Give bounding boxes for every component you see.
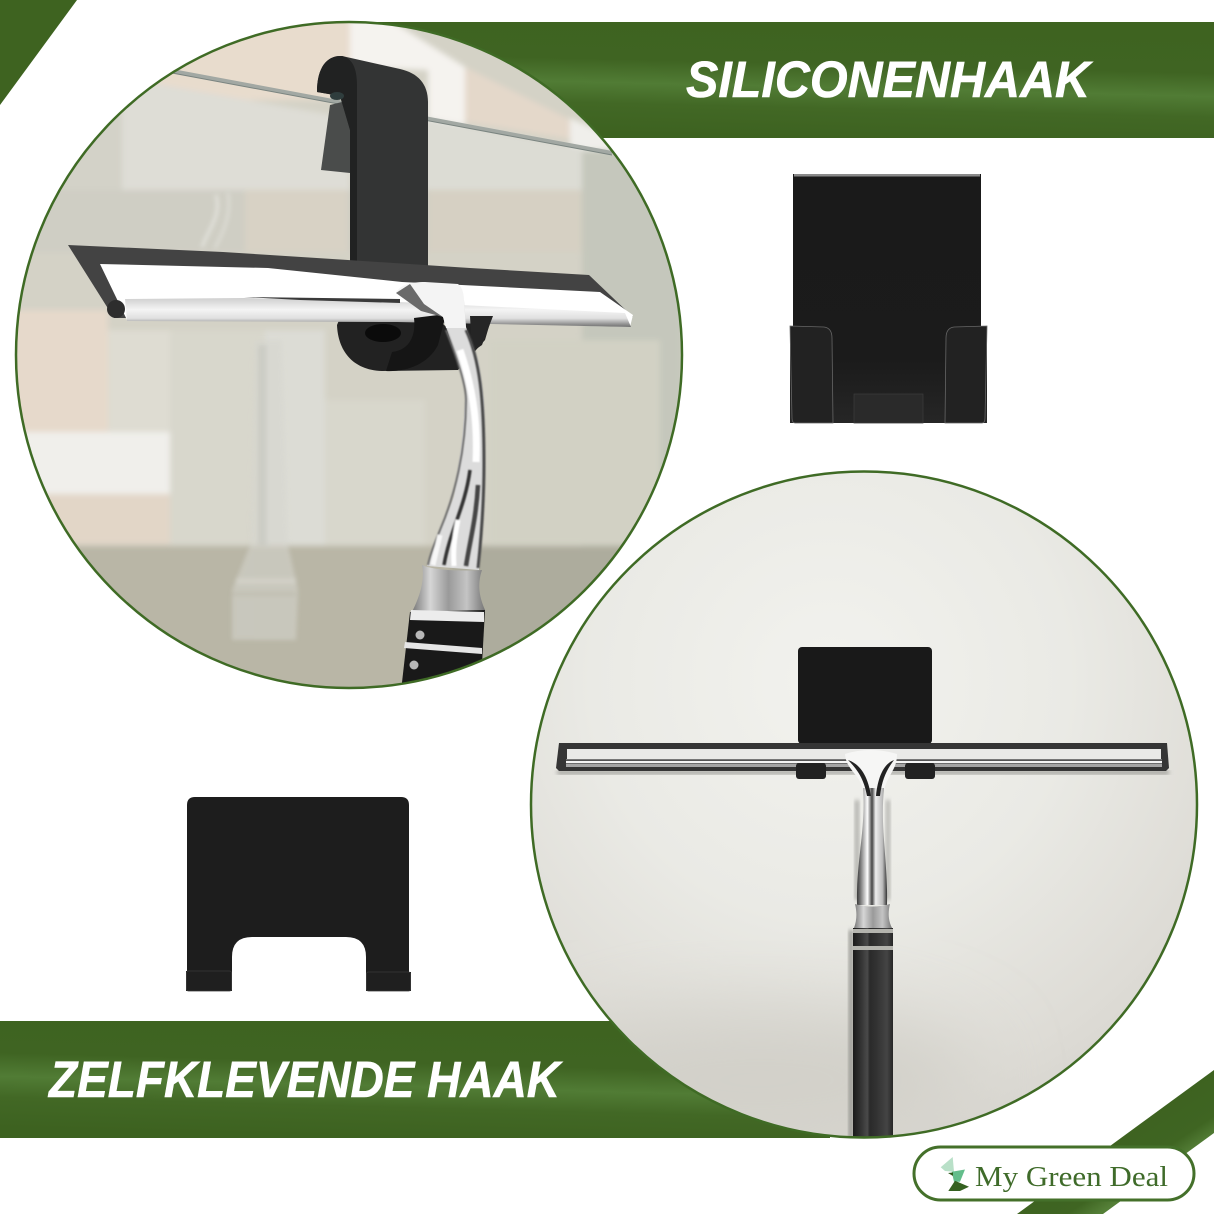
silver collar	[412, 565, 485, 612]
left clip	[796, 763, 826, 779]
product: black adhesive hook	[186, 797, 411, 991]
front clip of hook	[386, 314, 446, 371]
product: black silicone hook	[790, 174, 987, 423]
decorative diagonal stripe	[1017, 1070, 1214, 1214]
bottle reflection	[202, 193, 298, 640]
wall behind glass	[158, 24, 350, 101]
left beige wall	[17, 310, 108, 432]
black handle with rings	[402, 610, 485, 683]
rubber blade	[68, 245, 633, 318]
slot	[854, 394, 923, 423]
floor	[77, 544, 452, 687]
heading: zelfklevende haak: ZELFKLEVENDE HAAK	[47, 1051, 563, 1108]
chrome handle	[396, 282, 485, 570]
squeegee bar	[556, 743, 1169, 774]
photo circle: squeegee hanging on glass door	[0, 0, 700, 706]
chrome neck and handle	[845, 750, 897, 905]
rear cup of hook	[337, 322, 490, 371]
photo circle: squeegee on wall hook	[520, 460, 1210, 1150]
logo badge	[914, 1147, 1194, 1200]
chrome bar	[100, 264, 633, 327]
glass edge	[172, 71, 612, 153]
wall plate	[798, 647, 932, 744]
right pocket	[945, 326, 987, 423]
black handle with rings	[849, 928, 893, 1140]
foot right	[366, 972, 410, 991]
logo wordmark: My Green Deal	[975, 1161, 1168, 1193]
heading: siliconenhaak: SILICONENHAAK	[686, 51, 1093, 108]
decorative corner triangle	[0, 0, 77, 105]
banner: zelfklevende haak	[0, 1021, 830, 1138]
silicone hook strap	[317, 56, 428, 270]
logo icon: leaves	[941, 1157, 969, 1191]
silver collar	[854, 904, 892, 928]
right clip	[905, 763, 935, 779]
banner: siliconenhaak	[370, 22, 1214, 138]
left pocket	[790, 326, 833, 423]
foot left	[186, 971, 232, 991]
